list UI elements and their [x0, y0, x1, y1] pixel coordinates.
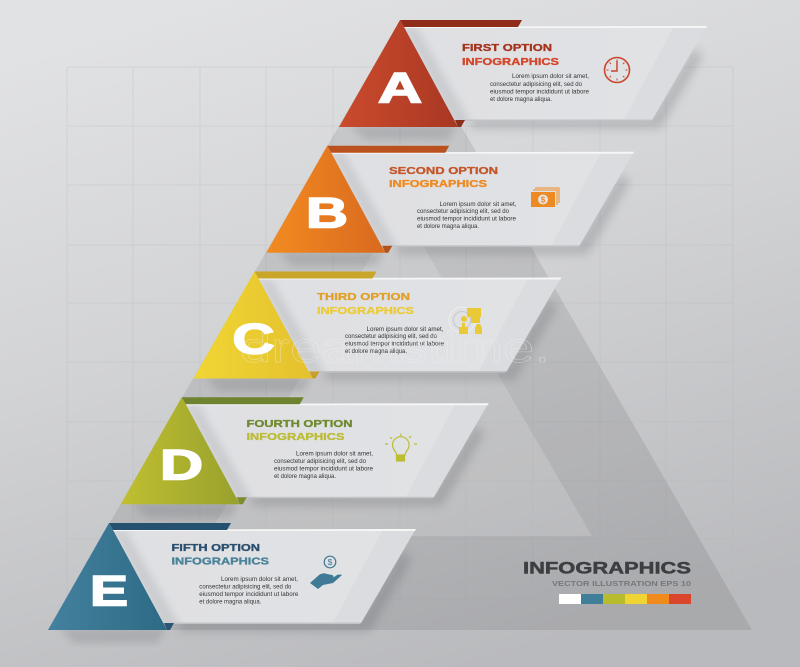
- body text C: consectetur adipisicing elit, sed do: [345, 333, 437, 340]
- shape: panel E: [48, 523, 416, 643]
- icon: network: [449, 307, 482, 334]
- heading E: INFOGRAPHICS: [172, 556, 269, 568]
- icon: money: [531, 188, 559, 207]
- body text D: eiusmod tempor incididunt ut labore: [274, 466, 373, 472]
- body text C: [345, 326, 444, 355]
- body text B: consectetur adipisicing elit, sed do: [417, 208, 509, 215]
- body text B: [417, 201, 517, 230]
- shape: panel B: [266, 146, 634, 266]
- background grid: [67, 67, 733, 600]
- body text E: eiusmod tempor incididunt ut labore: [199, 591, 298, 598]
- letter A: A: [378, 64, 422, 112]
- icon: money: $: [541, 196, 546, 204]
- heading C: INFOGRAPHICS: [317, 305, 414, 317]
- legend: colour bar: [559, 594, 691, 604]
- shape: panel C: [194, 272, 562, 392]
- body text A: eiusmod tempor incididunt ut labore: [490, 88, 589, 96]
- body text D: et dolore magna aliqua.: [274, 473, 336, 480]
- letter C: C: [232, 316, 274, 364]
- body text E: consectetur adipisicing elit, sed do: [199, 584, 291, 590]
- step E: fifth option: [48, 523, 416, 643]
- watermark: dreamstime.: [240, 324, 550, 371]
- body text A: consectetur adipisicing elit, sed do: [490, 81, 582, 88]
- icon: hand with coin: $: [328, 557, 333, 567]
- body text B: et dolore magna aliqua.: [417, 223, 479, 230]
- step D: fourth option: [121, 397, 489, 517]
- heading C: [317, 291, 414, 317]
- step B: second option: [266, 146, 634, 266]
- body text A: [490, 73, 589, 103]
- legend: infographics title: VECTOR ILLUSTRATION EPS 10: [552, 579, 691, 588]
- heading B: SECOND OPTION: [389, 165, 498, 177]
- legend: infographics title: INFOGRAPHICS: [523, 558, 691, 578]
- body text D: Lorem ipsum dolor sit amet,: [296, 450, 373, 458]
- heading E: FIFTH OPTION: [172, 542, 260, 554]
- body text C: eiusmod tempor incididunt ut labore: [345, 340, 444, 348]
- body text C: et dolore magna aliqua.: [345, 348, 407, 355]
- body text A: et dolore magna aliqua.: [490, 96, 552, 103]
- heading A: INFOGRAPHICS: [462, 56, 559, 68]
- body text E: [199, 576, 298, 606]
- body text B: eiusmod tempor incididunt ut labore: [417, 216, 516, 222]
- letter D: D: [160, 442, 203, 490]
- body text B: Lorem ipsum dolor sit amet,: [440, 201, 517, 208]
- body text A: Lorem ipsum dolor sit amet,: [512, 73, 589, 80]
- icon: hand with coin: [310, 556, 342, 589]
- heading B: [389, 165, 498, 190]
- heading E: [172, 542, 269, 568]
- step A: first option: [339, 20, 707, 140]
- letter E: E: [90, 568, 128, 616]
- letter B: B: [306, 190, 348, 238]
- heading A: [462, 42, 559, 68]
- heading D: INFOGRAPHICS: [246, 431, 344, 443]
- icon: light bulb: [385, 434, 417, 461]
- legend: infographics title: [523, 558, 691, 588]
- body text D: consectetur adipisicing elit, sed do: [274, 458, 366, 465]
- heading D: [246, 418, 352, 443]
- body text C: Lorem ipsum dolor sit amet,: [366, 326, 444, 333]
- heading C: THIRD OPTION: [317, 291, 410, 303]
- icon: clock: [604, 58, 630, 82]
- body text D: [274, 450, 373, 480]
- body text E: et dolore magna aliqua.: [199, 598, 261, 606]
- shape: panel A: [339, 20, 707, 140]
- shape: panel D: [121, 397, 489, 517]
- body text E: Lorem ipsum dolor sit amet,: [221, 576, 298, 583]
- heading D: FOURTH OPTION: [246, 418, 352, 430]
- heading B: INFOGRAPHICS: [389, 178, 487, 190]
- heading A: FIRST OPTION: [462, 42, 552, 54]
- step C: third option: [194, 272, 562, 392]
